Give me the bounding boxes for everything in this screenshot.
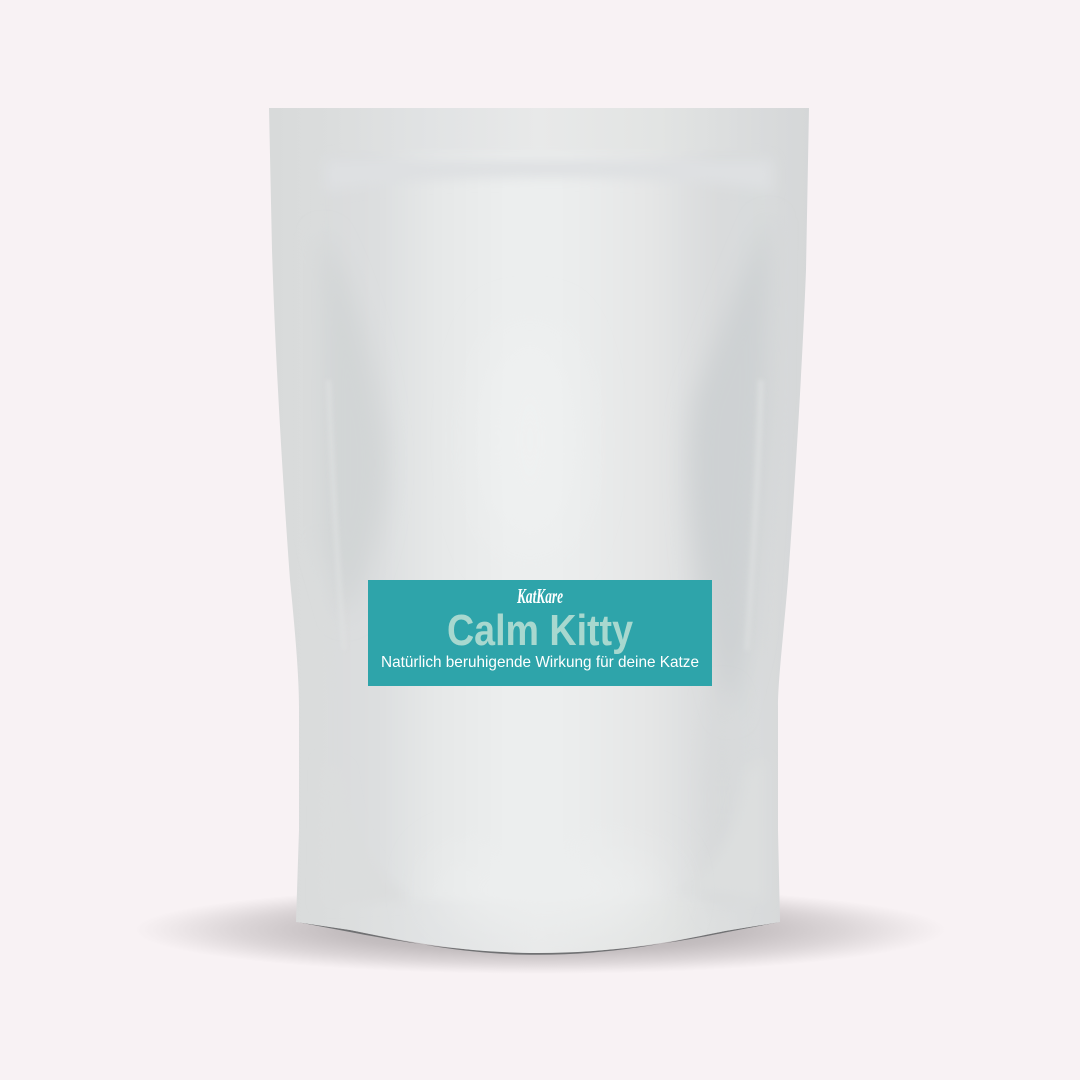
pouch shading bbox=[328, 268, 762, 896]
product mockup scene bbox=[167, 108, 914, 970]
product name: Calm Kitty bbox=[447, 606, 633, 655]
product label bbox=[368, 580, 712, 686]
left crease highlight bbox=[326, 380, 346, 650]
brand logo: KatKare bbox=[516, 584, 563, 608]
lower right shade bbox=[706, 690, 738, 910]
label background bbox=[368, 580, 712, 686]
top seal shade bbox=[442, 162, 627, 176]
pouch bbox=[269, 108, 809, 955]
right crease shadow bbox=[691, 287, 759, 668]
inner panel bbox=[320, 153, 776, 900]
right crease highlight bbox=[745, 380, 764, 650]
central highlight bbox=[490, 330, 570, 550]
pouch dark bottom edge bbox=[297, 922, 780, 955]
left gusset crease bbox=[320, 760, 412, 905]
lower highlight bbox=[440, 850, 660, 930]
left crease shadow bbox=[342, 320, 376, 568]
tagline: Natürlich beruhigende Wirkung für deine Katze bbox=[381, 654, 699, 671]
pouch body bbox=[269, 108, 809, 953]
floor shadow bbox=[134, 886, 946, 974]
right gusset crease bbox=[678, 760, 765, 900]
